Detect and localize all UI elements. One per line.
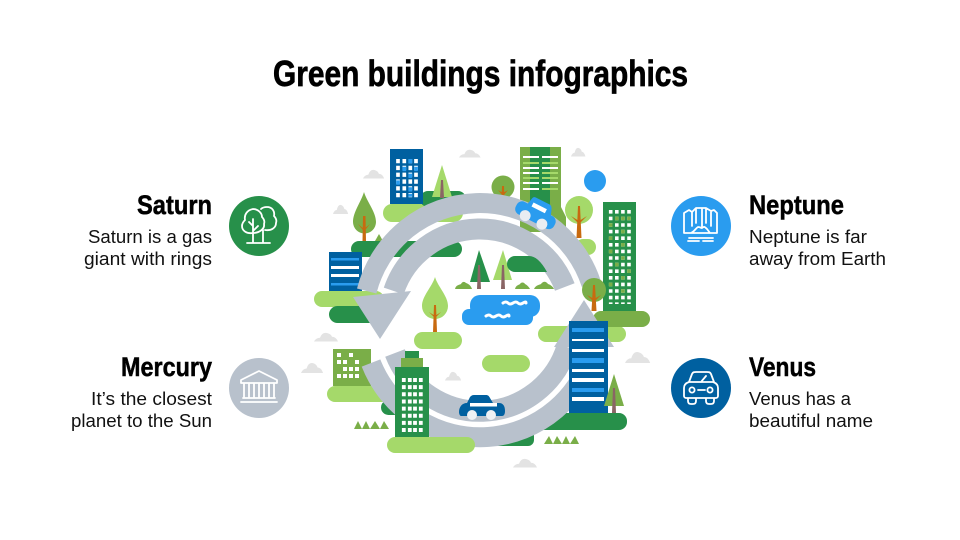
icon: trees	[229, 196, 289, 256]
tree: olive round top	[492, 176, 514, 198]
tree: olive round right	[582, 278, 606, 311]
icon: waterfall	[671, 196, 731, 256]
text: Mercury description: It’s the closest	[91, 389, 212, 409]
heading: Saturn: Saturn	[137, 190, 212, 220]
small triangles	[354, 421, 579, 444]
shrubs and pill centre	[455, 256, 554, 289]
panel: Mercury	[71, 352, 289, 431]
tree: light drop centre	[422, 277, 448, 332]
central city illustration	[301, 147, 650, 468]
text: Neptune description: Neptune is far	[749, 227, 867, 247]
heading: Mercury: Mercury	[121, 352, 212, 382]
clouds	[301, 148, 650, 468]
tree: light triangle top	[432, 165, 452, 198]
car: light blue on top arc	[512, 191, 562, 234]
circular arrows	[353, 203, 614, 437]
tree: olive triangle bottom-right	[604, 374, 624, 413]
icon: classical building	[229, 358, 289, 418]
panel: Venus	[671, 352, 873, 431]
building: green striped top	[520, 147, 566, 232]
text: Venus description: Venus has a	[749, 389, 852, 409]
icon: blue sun circle	[584, 170, 606, 192]
heading: Venus: Venus	[749, 352, 816, 382]
tree: light triangle centre	[493, 250, 512, 289]
arrow: top arc pointing left	[353, 203, 591, 339]
text: Venus description: beautiful name	[749, 411, 873, 431]
ground pills behind the ring	[314, 191, 650, 446]
title: Green buildings infographics	[273, 53, 688, 94]
text: Saturn description: Saturn is a gas	[88, 227, 212, 247]
building: blue left with stripes	[329, 252, 362, 291]
building: blue bottom-right	[569, 321, 608, 413]
building: olive bottom-left	[333, 349, 371, 386]
text: Neptune description: away from Earth	[749, 249, 886, 269]
icon: car	[671, 358, 731, 418]
lake	[462, 295, 540, 325]
tree: light round right	[565, 196, 593, 238]
text: Saturn description: giant with rings	[84, 249, 212, 269]
tree: olive drop left	[353, 192, 383, 241]
arrow: bottom arc pointing up	[371, 300, 614, 437]
building: blue top-left	[390, 149, 423, 204]
panel: Saturn	[84, 190, 289, 269]
panel: Neptune	[671, 190, 886, 269]
pills in front	[387, 332, 530, 453]
car: dark blue on bottom arc	[459, 395, 505, 420]
text: Mercury description: planet to the Sun	[71, 411, 212, 431]
tree: dark triangle centre	[470, 250, 490, 289]
building: green tall right	[603, 202, 636, 311]
heading: Neptune: Neptune	[749, 190, 844, 220]
building: green bottom-left	[395, 351, 429, 437]
